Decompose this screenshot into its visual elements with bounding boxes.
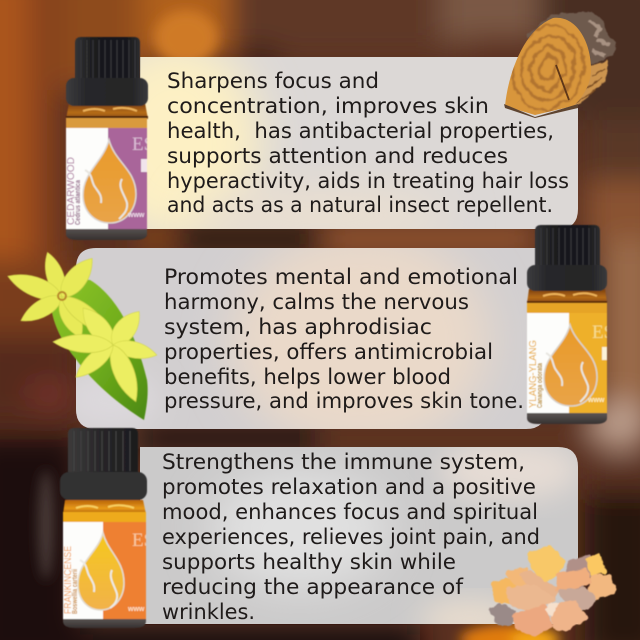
flower: upper: [4, 250, 115, 342]
text: frankincense benefits: [162, 450, 540, 625]
text: ylang-ylang benefits: benefits, helps lower blood: [164, 365, 451, 390]
text: cedarwood benefits: and acts as a natural insect repellent.: [167, 193, 553, 218]
text: frankincense benefits: wrinkles.: [162, 600, 255, 625]
illustration: frankincense resin: [492, 547, 615, 635]
bottle: frankincense: Boswellia carterii: [72, 569, 79, 614]
text: frankincense benefits: supports healthy skin while: [162, 550, 456, 575]
bottle: ylang-ylang: ES: [592, 322, 614, 343]
wood bark: [527, 12, 616, 66]
text: cedarwood benefits: Sharpens focus and: [167, 69, 379, 94]
wood cut face: [505, 18, 591, 115]
bottle: cedarwood: [66, 37, 154, 240]
text: cedarwood benefits: supports attention and reduces: [167, 144, 508, 169]
text: cedarwood benefits: hyperactivity, aids in treating hair loss: [167, 169, 569, 194]
text: frankincense benefits: experiences, relieves joint pain, and: [162, 525, 540, 550]
bottle: cedarwood: ES: [132, 134, 154, 155]
icon: oil drop: [78, 533, 124, 610]
bottle: ylang-ylang: [527, 225, 614, 424]
text: cedarwood benefits: health, has antibacterial properties,: [167, 119, 554, 144]
bottle: frankincense: [60, 428, 154, 628]
illustration: cedar wood slice: [504, 11, 616, 118]
bottle: frankincense: ES: [132, 530, 154, 551]
flower: lower: [53, 302, 159, 405]
text: frankincense benefits: mood, enhances focus and spiritual: [162, 500, 538, 525]
bottle: frankincense: FRANKINCENSE: [63, 546, 74, 614]
text: frankincense benefits: reducing the appearance of: [162, 575, 463, 600]
text: cedarwood benefits: [167, 69, 569, 218]
text: ylang-ylang benefits: pressure, and improves skin tone.: [164, 389, 524, 414]
bottle: ylang-ylang: YLANG-YLANG: [528, 340, 539, 408]
bottle: frankincense: www: [127, 606, 145, 613]
bottle: ylang-ylang: www: [587, 397, 605, 404]
text: ylang-ylang benefits: properties, offers antimicrobial: [164, 340, 493, 365]
illustration: ylang-ylang flowers on leaf: [4, 250, 159, 420]
text: frankincense benefits: promotes relaxation and a positive: [162, 475, 536, 500]
panel: ylang-ylang: [76, 248, 542, 429]
bottle cap: [60, 428, 147, 500]
icon: oil drop: [83, 140, 136, 223]
text: cedarwood benefits: concentration, improves skin: [167, 94, 489, 119]
text: ylang-ylang benefits: system, has aphrodisiac: [164, 315, 432, 340]
panel: cedarwood: [140, 57, 578, 229]
wood side: [570, 60, 608, 108]
bottle cap: [66, 37, 148, 106]
panel: frankincense: [140, 447, 578, 624]
bottle: cedarwood: Cedrus atlantica: [75, 180, 82, 225]
text: ylang-ylang benefits: Promotes mental and emotional: [164, 265, 518, 290]
bottle: ylang-ylang: Cananga odorata: [537, 363, 544, 408]
bottle cap: [527, 225, 607, 291]
text: frankincense benefits: Strengthens the immune system,: [162, 450, 525, 475]
text: ylang-ylang benefits: [164, 265, 524, 414]
leaf: [51, 278, 148, 420]
text: ylang-ylang benefits: harmony, calms the nervous: [164, 290, 469, 315]
icon: oil drop: [544, 325, 597, 406]
bottle: cedarwood: www: [127, 212, 145, 219]
bottle: cedarwood: CEDARWOOD: [66, 157, 77, 225]
